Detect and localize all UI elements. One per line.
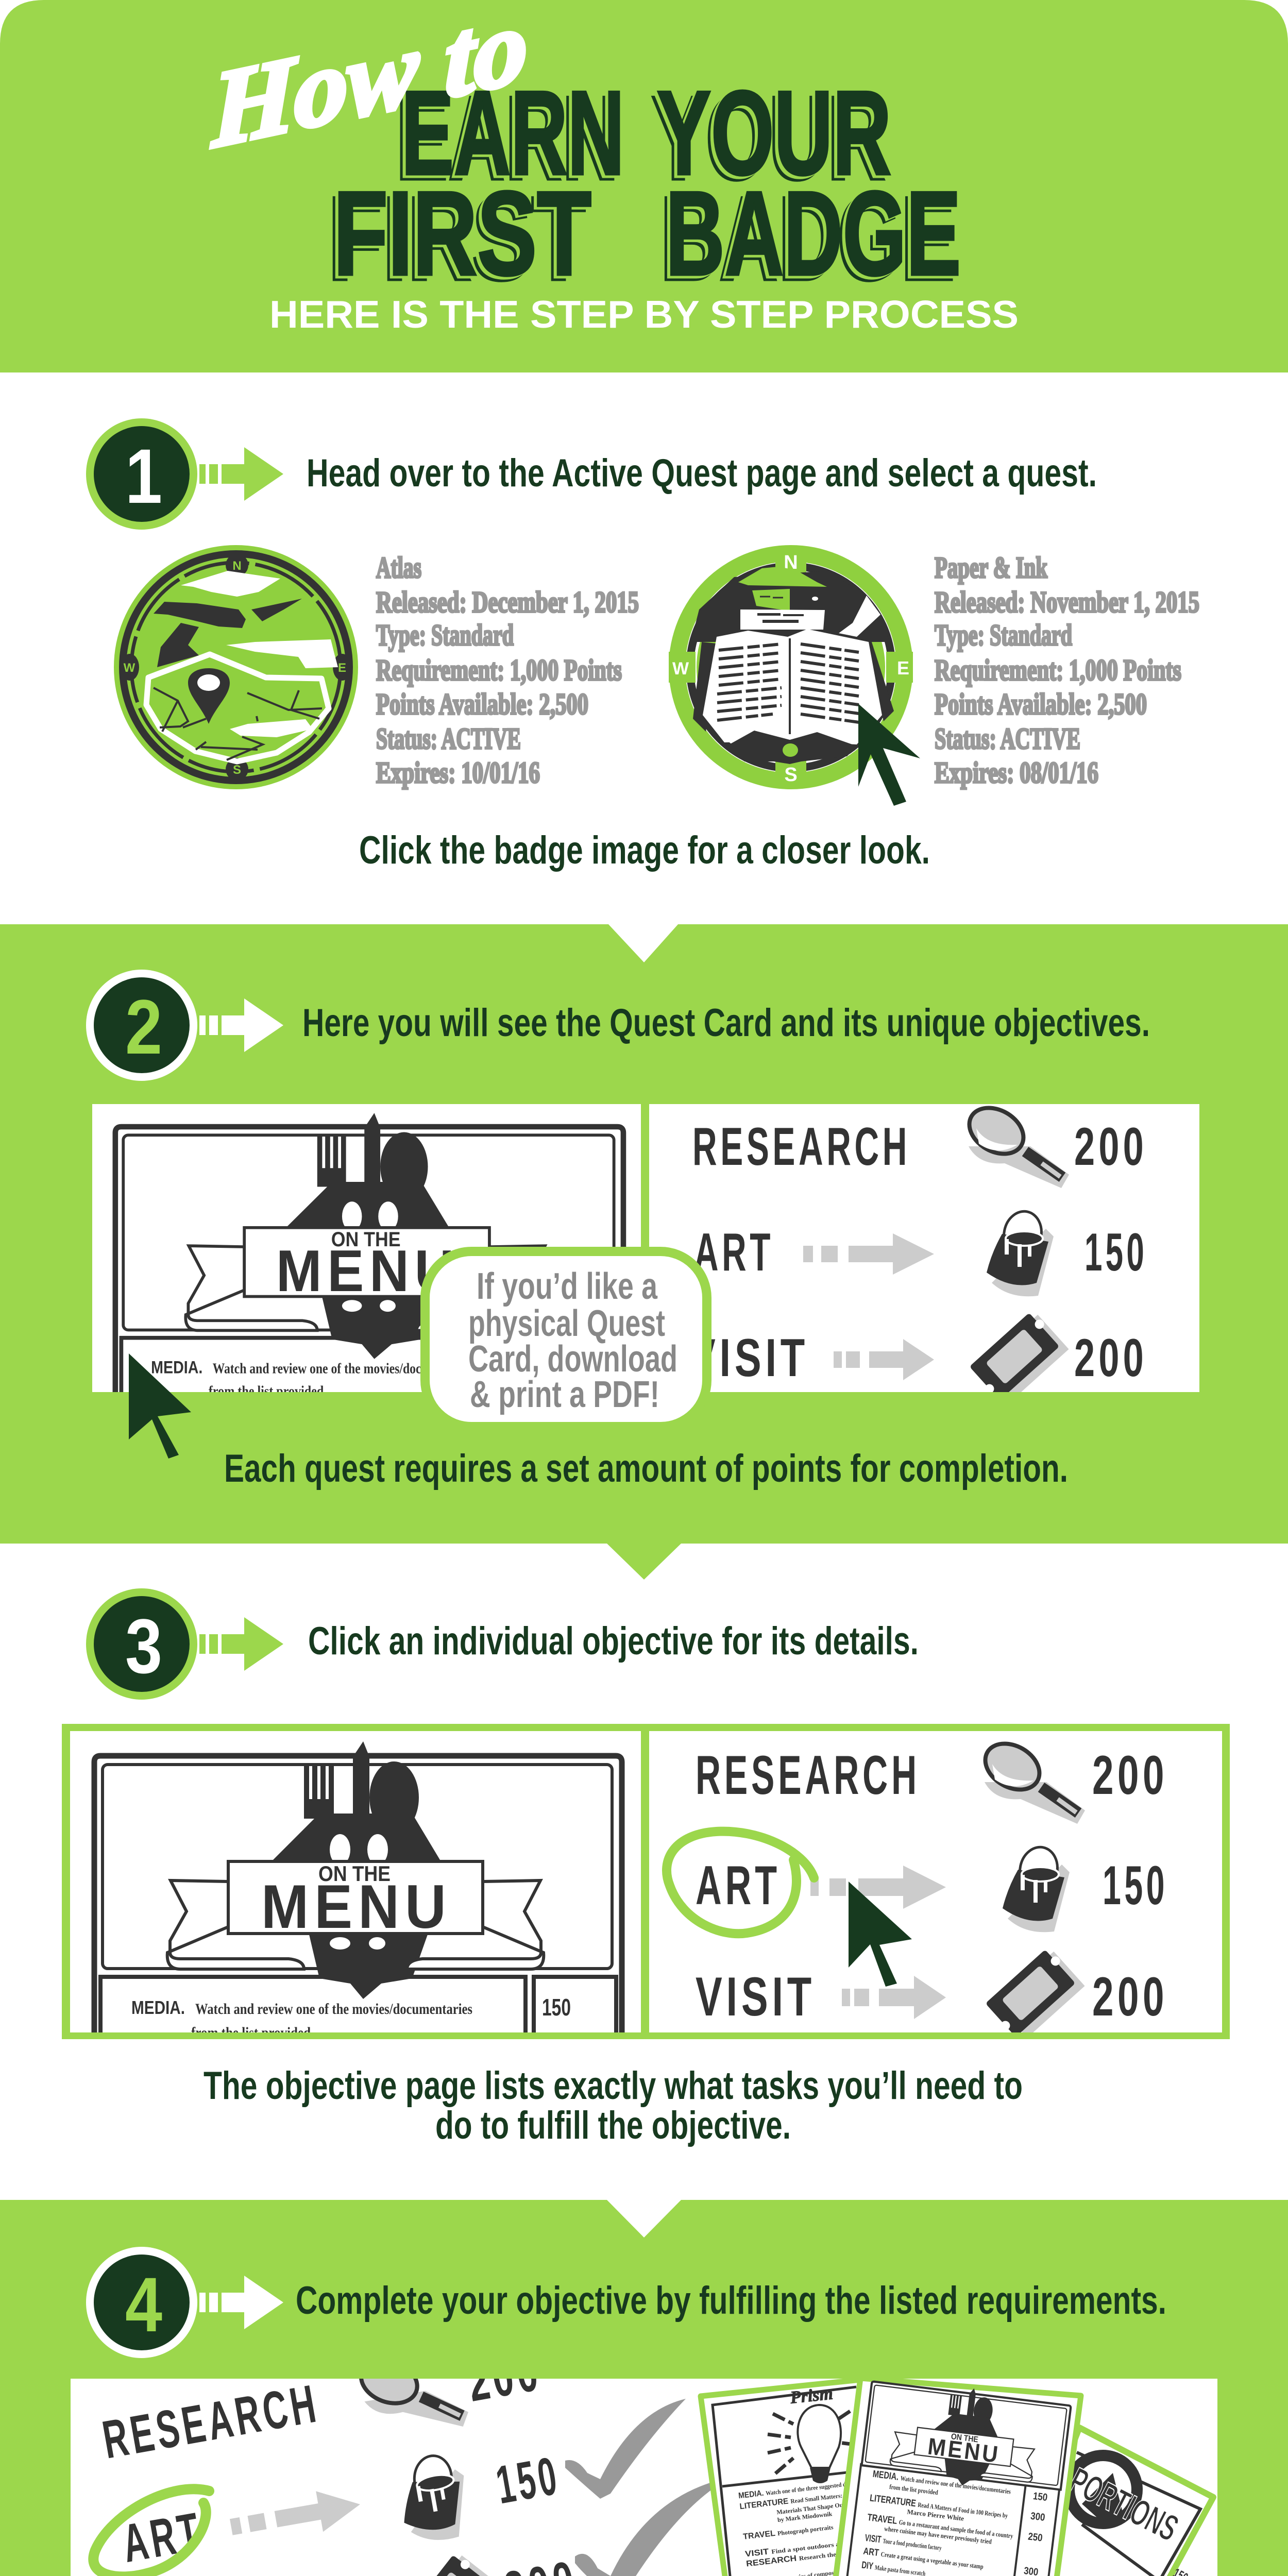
- research row: 200: [1074, 1117, 1147, 1177]
- step 2 number badge: 2: [125, 984, 162, 1070]
- details: atlas: Atlas: [376, 551, 421, 584]
- quest card art: 150: [547, 1355, 574, 1380]
- title: earn your first badge: [333, 66, 961, 300]
- sheet: on the menu: ON THE: [951, 2432, 979, 2444]
- tilted objectives list: [93, 2324, 601, 2576]
- hand drawn circle around art: [667, 1832, 814, 1934]
- badge: paper and ink: E: [897, 657, 909, 679]
- objectives panel: [649, 1098, 1199, 1410]
- step 1 panel: [86, 418, 1199, 872]
- sheet: prism and insight: by Mark Miodownik: [777, 2510, 833, 2523]
- details: atlas: Expires: 10/01/16: [376, 756, 540, 789]
- badge: paper and ink: S: [784, 764, 798, 786]
- quest card art: [112, 1113, 626, 1392]
- badge: paper and ink: W: [672, 659, 689, 679]
- hand drawn circle around art: [93, 2489, 209, 2576]
- quest card art large: MENU: [261, 1872, 452, 1941]
- visit row: VISIT: [689, 1328, 809, 1388]
- subtitle: HERE IS THE STEP BY STEP PROCESS: [269, 293, 1019, 336]
- details: atlas: Requirement: 1,000 Points: [376, 653, 622, 687]
- cursor: quest card: [129, 1353, 191, 1459]
- white pointer into step 2: [608, 924, 679, 962]
- sheet: prism and insight: TRAVEL Photograph portraits: [742, 2522, 834, 2541]
- green pointer into step 3: [606, 1543, 682, 1580]
- arrow: visit: [834, 1339, 934, 1380]
- quest card art: ON THE: [331, 1228, 401, 1251]
- step 3 arrow: [199, 1617, 283, 1671]
- title: earn your first badge: FIRST: [333, 167, 591, 300]
- points and icons column: [349, 2324, 601, 2576]
- title: earn your first badge: BADGE: [666, 167, 961, 300]
- sheet: prism and insight: VISIT Find a spot outdoors and watch the: [744, 2535, 879, 2559]
- icon: magnifier: [977, 1734, 1085, 1824]
- objectives list: RESEARCH: [696, 1744, 920, 1806]
- objectives list: [696, 1734, 1168, 2046]
- checkmark two: [575, 2477, 732, 2576]
- step 1 number badge: 1: [125, 433, 162, 519]
- title: earn your first badge: YOUR: [657, 66, 891, 200]
- arrow: art: [803, 1233, 934, 1275]
- sheet: on the menu: 300: [1030, 2511, 1046, 2523]
- callout: physical quest card: [425, 1251, 707, 1427]
- sheet: prism and insight: Materials That Shape Our World: [776, 2499, 864, 2516]
- step 4 image panel: [71, 2324, 1217, 2576]
- callout: physical quest card: physical Quest: [468, 1303, 665, 1344]
- sheet: portions: [979, 2428, 1213, 2576]
- details: atlas: Type: Standard: [376, 618, 514, 652]
- step 1 number badge: [86, 418, 197, 530]
- arrow: art: [228, 2484, 364, 2547]
- details: atlas: Status: ACTIVE: [376, 722, 521, 755]
- details: atlas: [376, 551, 639, 789]
- details: paper and ink: Released: November 1, 2015: [935, 585, 1199, 619]
- points and icons column: 200: [463, 2342, 546, 2413]
- callout: physical quest card: Card, download: [468, 1338, 677, 1380]
- tilted objectives list: RESEARCH: [98, 2374, 324, 2470]
- badge: paper and ink: N: [784, 552, 798, 573]
- icon: ticket: [982, 1946, 1085, 2046]
- callout: physical quest card: If you’d like a: [477, 1266, 658, 1307]
- callout: physical quest card: & print a PDF!: [470, 1374, 659, 1415]
- tilted objectives list: ART: [118, 2501, 207, 2574]
- sheet: on the menu: VISIT Tour a food production factory: [865, 2533, 942, 2553]
- points and icons column: 150: [492, 2446, 564, 2515]
- details: atlas: Points Available: 2,500: [376, 687, 588, 721]
- sheet: on the menu: MEDIA. Watch and review one of the movies/documentaries: [872, 2469, 1011, 2497]
- arrow: visit: [842, 1976, 946, 2019]
- step 3 caption: [204, 2064, 1023, 2147]
- step 3 number badge: [86, 1588, 197, 1700]
- white pointer into step 4: [606, 2199, 682, 2238]
- objectives list: 150: [1103, 1854, 1168, 1916]
- step 4 panel: [0, 2199, 1288, 2576]
- step 3 panel: [62, 1543, 1230, 2147]
- art row: ART: [694, 1223, 774, 1282]
- badge: atlas: S: [233, 763, 241, 777]
- objectives list: ART: [696, 1854, 781, 1916]
- quest card art large: [94, 1741, 622, 2080]
- details: paper and ink: Status: ACTIVE: [935, 722, 1080, 755]
- quest card panel: [92, 1104, 641, 1392]
- sheet: on the menu: 250: [1027, 2531, 1043, 2544]
- step 4 number badge: [86, 2247, 197, 2358]
- sheet: prism and insight: Prism: [789, 2384, 834, 2408]
- art row: 150: [1084, 1223, 1147, 1282]
- cursor: badge: [858, 704, 920, 806]
- sheet: on the menu: TRAVEL Go to a restaurant and sample the food of a country: [867, 2512, 1014, 2541]
- step 3 number badge: 3: [125, 1603, 162, 1689]
- sheet: on the menu: ART Create a great using a vegetable as your stamp: [862, 2546, 984, 2571]
- checkmark one: [565, 2399, 686, 2499]
- step 3 heading: Click an individual objective for its details.: [308, 1619, 919, 1663]
- sheet: prism and insight: LITERATURE Read Small Matters: Exploring the: [739, 2487, 879, 2511]
- badge: atlas: W: [124, 661, 135, 675]
- step 3 caption: do to fulfill the objective.: [435, 2104, 791, 2147]
- step 2 arrow: [199, 998, 283, 1052]
- step 1 caption: Click the badge image for a closer look.: [359, 828, 930, 872]
- quest card art large: ON THE: [318, 1861, 391, 1886]
- sheet: prism and insight: MEDIA. Watch one of the three suggested documentaries: [738, 2476, 877, 2500]
- step 1 arrow: [199, 447, 283, 501]
- objectives list: 200: [1092, 1744, 1168, 1806]
- icon: magnifier: [968, 1106, 1069, 1188]
- quest card art: from the list provided: [209, 1383, 324, 1399]
- step 2 number badge: [86, 970, 197, 1081]
- cursor: objective: [849, 1882, 912, 1987]
- step 3 caption: The objective page lists exactly what tasks you’ll need to: [204, 2064, 1023, 2108]
- step 4 arrow: [199, 2276, 283, 2329]
- details: paper and ink: Expires: 08/01/16: [935, 756, 1098, 789]
- art row: [694, 1208, 1147, 1296]
- visit row: [711, 1314, 1142, 1392]
- quest card art large: 150: [542, 1994, 571, 2021]
- sheet: on the menu: [822, 2376, 1081, 2576]
- step 2 panel: [0, 924, 1288, 1544]
- sheet: on the menu: Marco Pierre White: [907, 2507, 964, 2522]
- details: paper and ink: Paper & Ink: [935, 551, 1048, 584]
- icon: paint can: [987, 1208, 1054, 1296]
- details: paper and ink: [935, 551, 1199, 789]
- quest card art large: Watch and review one of the movies/documentaries: [195, 2001, 472, 2018]
- details: paper and ink: Points Available: 2,500: [935, 687, 1147, 721]
- panel frame: [62, 1724, 1230, 2039]
- quest card art large: from the list provided: [191, 2024, 311, 2041]
- quest card art: Watch and review one of the movies/documentaries: [213, 1361, 480, 1377]
- visit row: 200: [1074, 1328, 1147, 1388]
- badge: paper and ink: [669, 545, 913, 789]
- research row: RESEARCH: [692, 1117, 910, 1177]
- details: paper and ink: Requirement: 1,000 Points: [935, 653, 1181, 687]
- title: earn your first badge: EARN: [401, 66, 624, 200]
- research row: [692, 1098, 1147, 1188]
- details: atlas: Released: December 1, 2015: [376, 585, 639, 619]
- quest card art: MENU: [276, 1238, 460, 1304]
- badge: atlas: N: [232, 559, 242, 573]
- arrow: art: [810, 1866, 946, 1909]
- header panel: [0, 0, 1288, 372]
- quest card art large: MEDIA.: [131, 1997, 185, 2018]
- badge: atlas: [114, 545, 358, 789]
- quest card art: MEDIA.: [151, 1358, 202, 1377]
- sheet: on the menu: MENU: [926, 2433, 1002, 2468]
- objectives list: VISIT: [696, 1965, 816, 2027]
- sheet: prism and insight: RESEARCH Research the link between: [745, 2545, 875, 2569]
- step 3 framed panel: [62, 1724, 1230, 2080]
- icon: paint can: [1003, 1843, 1070, 1932]
- icon: ticket: [971, 1314, 1069, 1392]
- badge: atlas: E: [338, 661, 346, 675]
- details: paper and ink: Type: Standard: [935, 618, 1072, 652]
- step 2 caption: Each quest requires a set amount of points for completion.: [224, 1447, 1068, 1490]
- sheet: on the menu: 150: [1032, 2490, 1048, 2503]
- objectives list: 200: [1092, 1965, 1168, 2027]
- sheet: prism and insight: [701, 2379, 895, 2576]
- sheet: on the menu: where cuisine may have never previously tried: [884, 2524, 992, 2546]
- sheet: on the menu: LITERATURE Read A Matters of Food in 100 Recipes by: [869, 2493, 1009, 2520]
- sheet: on the menu: from the list provided: [889, 2483, 939, 2496]
- step 4 number badge: 4: [125, 2261, 162, 2348]
